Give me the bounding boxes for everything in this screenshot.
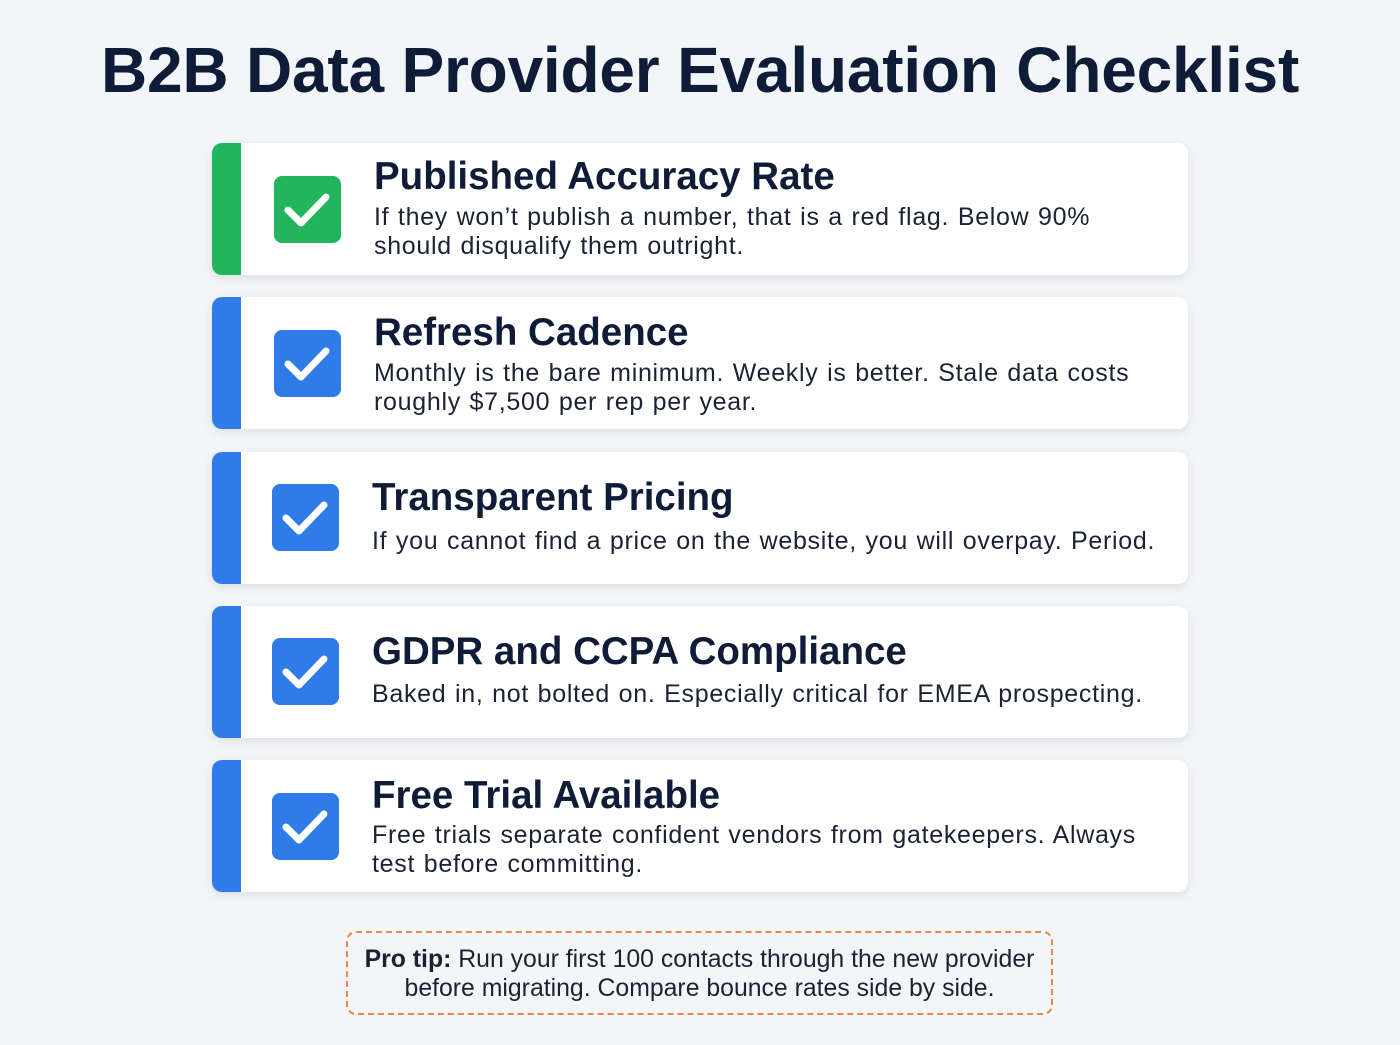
card: transparent pricing — [212, 452, 1188, 584]
icon: blue checkbox — [272, 638, 339, 705]
heading: Transparent Pricing — [372, 476, 734, 519]
callout: pro tip: Pro tip: Run your first 100 contacts through the new provider — [365, 946, 1034, 973]
text: Monthly is the bare minimum. Weekly is better. Stale data costs — [374, 359, 1129, 387]
card: refresh cadence — [212, 297, 1188, 429]
icon: blue checkbox — [272, 793, 339, 860]
text — [374, 203, 1090, 260]
callout: pro tip — [346, 931, 1053, 1015]
callout: pro tip: before migrating. Compare bounce rates side by side. — [405, 975, 994, 1002]
card: free trial available — [212, 760, 1188, 892]
icon: green checkbox — [274, 176, 341, 243]
card: published accuracy rate — [212, 143, 1188, 275]
text: roughly $7,500 per rep per year. — [374, 388, 757, 416]
text: should disqualify them outright. — [374, 232, 744, 260]
title: B2B Data Provider Evaluation Checklist — [101, 34, 1299, 106]
card: gdpr and ccpa compliance — [212, 606, 1188, 738]
heading: Refresh Cadence — [374, 311, 689, 354]
heading: GDPR and CCPA Compliance — [372, 630, 907, 673]
heading: Free Trial Available — [372, 774, 720, 817]
text — [372, 821, 1136, 878]
icon: blue checkbox — [274, 330, 341, 397]
text — [374, 359, 1129, 416]
icon: blue checkbox — [272, 484, 339, 551]
text: Baked in, not bolted on. Especially critical for EMEA prospecting. — [372, 680, 1143, 708]
text: test before committing. — [372, 850, 643, 878]
text: If you cannot find a price on the website, you will overpay. Period. — [372, 527, 1155, 555]
text: If they won’t publish a number, that is a red flag. Below 90% — [374, 203, 1090, 231]
text: Free trials separate confident vendors from gatekeepers. Always — [372, 821, 1136, 849]
heading: Published Accuracy Rate — [374, 155, 835, 198]
